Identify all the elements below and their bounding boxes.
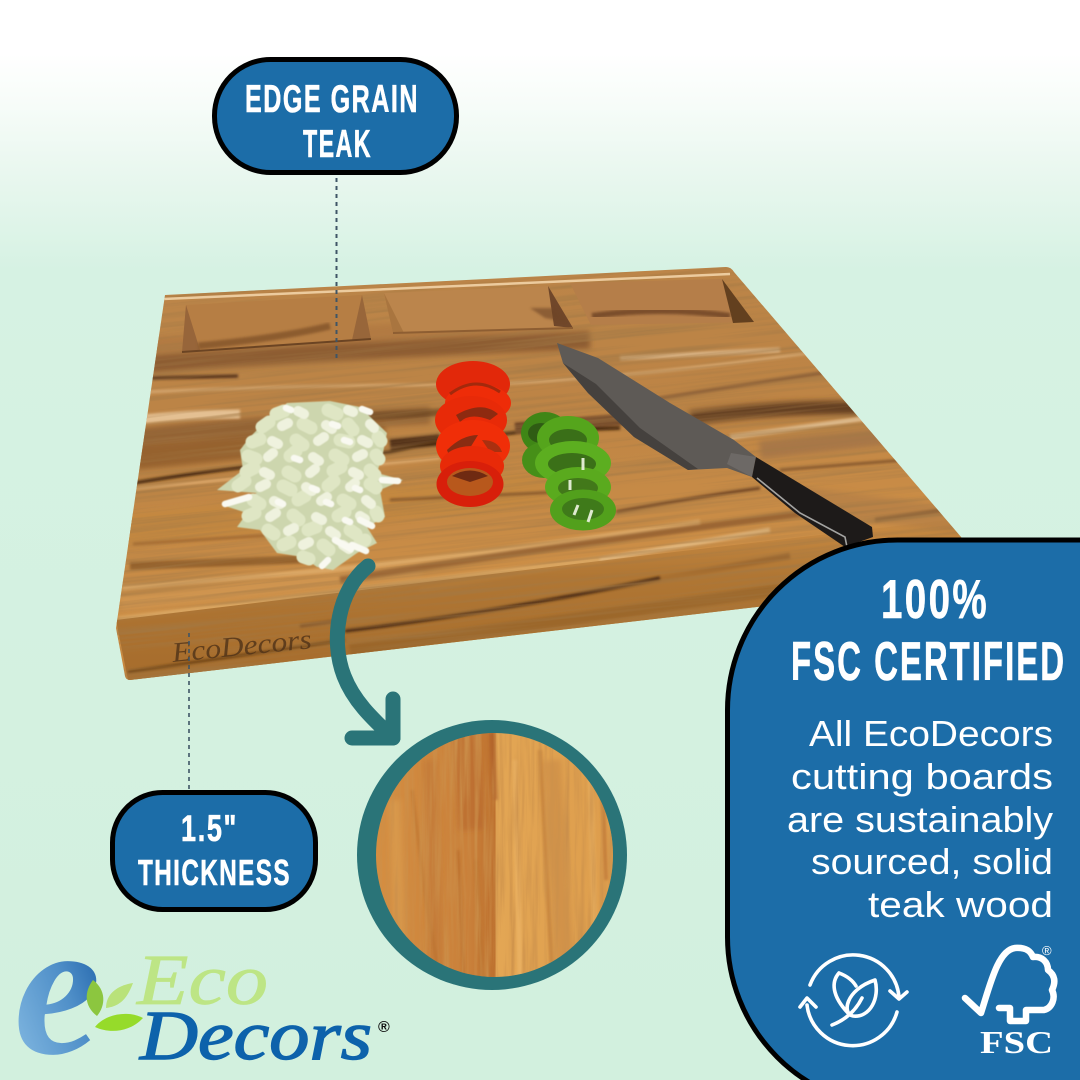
logo word Eco: Eco [136, 940, 268, 1020]
green pepper rings [521, 412, 616, 530]
slot 3 [570, 279, 754, 325]
EcoDecors logo [14, 880, 390, 1080]
icon: FSC check tree logo: FSC [980, 1024, 1053, 1060]
icon: FSC check tree logo [965, 943, 1054, 1060]
icon: recycle leaf [800, 955, 907, 1046]
cutting board photo [116, 267, 962, 680]
panel body text [787, 713, 1053, 925]
callout: 1.5 inch thickness: THICKNESS [138, 852, 291, 893]
callout: edge grain teak: EDGE GRAIN [245, 78, 419, 121]
board surface [116, 267, 985, 680]
chopped onion [217, 401, 403, 570]
logo registered mark: ® [378, 1019, 390, 1036]
panel heading [791, 568, 1066, 692]
chef knife [557, 343, 873, 547]
slot 2 [384, 286, 573, 333]
logo word Decors: Decors [139, 998, 372, 1075]
panel body text: All EcoDecors [809, 713, 1053, 754]
callout: 1.5 inch thickness: 1.5" [181, 808, 238, 849]
panel body text: sourced, solid [811, 841, 1053, 882]
callout: 1.5 inch thickness [112, 792, 316, 910]
panel body text: cutting boards [791, 756, 1053, 797]
fine wood grain [116, 267, 956, 680]
callout: edge grain teak: TEAK [303, 123, 372, 166]
dotted leader line: thickness [188, 633, 190, 793]
logo leaves [87, 980, 143, 1031]
dotted leader line: edge grain [336, 178, 338, 362]
panel body text: teak wood [868, 884, 1053, 925]
curved arrow to grain detail [337, 566, 393, 738]
callout: edge grain teak [214, 60, 456, 172]
rim light line [163, 274, 730, 299]
panel: FSC certification [728, 540, 1080, 1080]
panel heading: 100% [881, 568, 989, 630]
icon: FSC check tree logo: ® [1042, 943, 1052, 958]
grain detail circle [357, 720, 627, 990]
panel body text: are sustainably [787, 799, 1053, 840]
juice groove compartments [182, 279, 754, 352]
slot 1 [182, 295, 371, 352]
board front face [116, 530, 962, 680]
engraved EcoDecors logo: EcoDecors [169, 624, 313, 669]
red pepper rings [435, 361, 511, 507]
